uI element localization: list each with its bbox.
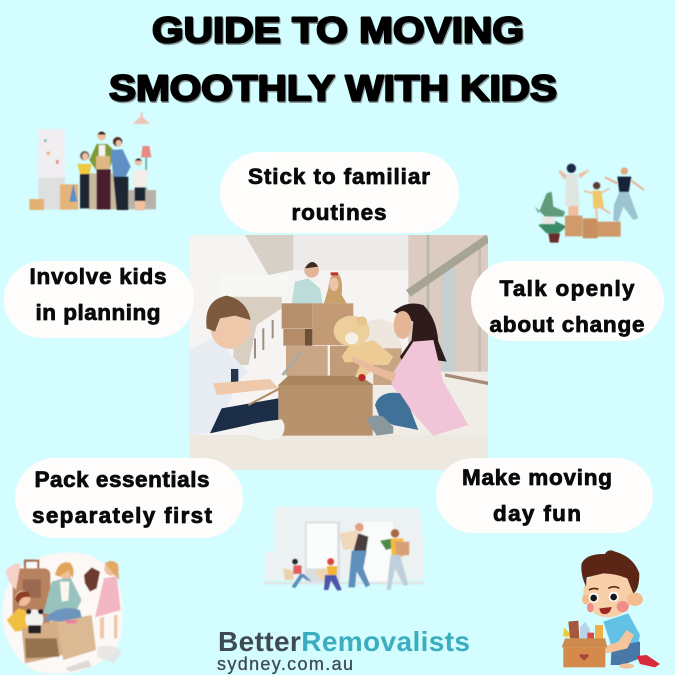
callout: involve kids in planning: Involve kids: [30, 264, 166, 289]
callout: make moving day fun: Make moving: [462, 465, 612, 490]
illustration: family carrying boxes: [263, 507, 423, 591]
logo: Better Removalists sydney.com.au: BetterRemovalists: [218, 626, 470, 657]
illustration: mother and kids packing: [2, 552, 123, 674]
logo: Better Removalists sydney.com.au: [217, 626, 470, 674]
photo: children packing boxes with parents: [190, 235, 488, 470]
callout: talk openly about change: [471, 261, 664, 341]
illustration: family dancing on boxes: [535, 164, 644, 243]
callout: make moving day fun: [436, 458, 653, 533]
title: SMOOTHLY WITH KIDS: [109, 68, 557, 108]
callout: involve kids in planning: in planning: [36, 300, 160, 325]
title: SMOOTHLY WITH KIDS: [110, 69, 558, 110]
callout: make moving day fun: day fun: [493, 501, 581, 526]
callout: pack essentials separately first: Pack essentials: [34, 467, 210, 492]
logo: Better Removalists sydney.com.au: sydney.com.au: [217, 654, 353, 674]
illustration: boy with box of essentials: [562, 550, 660, 669]
illustration: family with boxes and fridge: [29, 113, 156, 210]
callout: talk openly about change: about change: [490, 312, 644, 337]
callout: stick to familiar routines: [220, 152, 459, 233]
callout: involve kids in planning: [4, 261, 194, 338]
callout: talk openly about change: Talk openly: [500, 276, 635, 301]
title: [109, 10, 558, 110]
callout: pack essentials separately first: separately first: [32, 503, 212, 528]
callout: stick to familiar routines: Stick to familiar: [248, 164, 430, 189]
callout: stick to familiar routines: routines: [292, 200, 386, 225]
callout: pack essentials separately first: [15, 458, 243, 538]
title: GUIDE TO MOVING: [152, 10, 524, 50]
title: GUIDE TO MOVING: [153, 11, 525, 52]
